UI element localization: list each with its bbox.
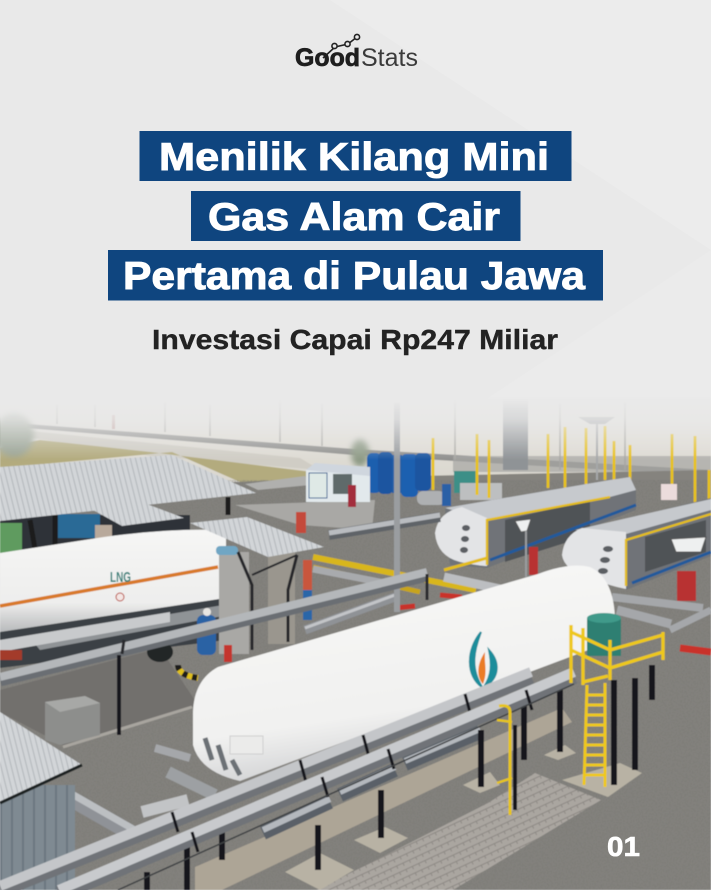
long pipe upper left <box>0 572 427 735</box>
yellow vent poles <box>433 426 709 510</box>
gas unit 1 <box>435 477 636 570</box>
LNG tanker: LNG <box>110 569 131 586</box>
main pipe A <box>0 672 531 890</box>
skid equipment <box>417 471 502 506</box>
photo: LNG plant <box>0 398 711 890</box>
dispenser column <box>216 546 312 654</box>
worker <box>197 608 216 655</box>
black pipe supports <box>147 690 560 890</box>
logo: GoodStats <box>295 34 418 72</box>
far road and fence <box>20 400 711 476</box>
lower foil pipe segments <box>263 729 480 833</box>
logo: GoodStats: Good <box>295 44 360 72</box>
page number: 01 <box>607 831 640 862</box>
yellow platform railing <box>571 625 663 685</box>
green cylinder <box>587 613 621 656</box>
fog overlay <box>0 398 711 460</box>
yellow valve post <box>497 706 515 815</box>
tank valves <box>142 738 240 812</box>
hazy backdrop <box>0 400 711 510</box>
paved walkway <box>317 773 601 890</box>
tower <box>503 400 528 470</box>
info signs <box>296 484 706 601</box>
light mast far <box>578 417 615 480</box>
logo: GoodStats: Stats <box>361 44 418 72</box>
title line 2 <box>191 191 520 241</box>
flame logo <box>470 632 497 687</box>
shelter frames <box>0 497 228 556</box>
blue tanks <box>367 452 431 497</box>
yellow ladder <box>584 683 605 787</box>
subtitle: Investasi Capai Rp247 Miliar <box>152 324 558 355</box>
title line 3: Pertama di Pulau Jawa <box>123 255 585 298</box>
title line 2: Gas Alam Cair <box>208 196 500 239</box>
left paving <box>0 648 198 747</box>
cabin bottom left <box>0 712 82 890</box>
main pipe B <box>59 672 574 890</box>
shelter roof small <box>84 500 184 526</box>
middle pipework <box>305 515 711 652</box>
tall mast <box>394 403 400 612</box>
grey utility box <box>45 696 100 745</box>
main LNG storage tank <box>193 566 615 781</box>
title line 1: Menilik Kilang Mini <box>159 136 549 179</box>
support footings <box>285 745 576 890</box>
hazard barrier <box>178 645 232 678</box>
shelter roof large <box>0 455 256 521</box>
gas unit 2 <box>562 498 711 590</box>
gravel ground <box>0 470 711 890</box>
LNG tanker <box>0 530 226 668</box>
concrete pipe sleeper <box>195 708 572 890</box>
grass and tree <box>0 413 369 484</box>
rear pipe <box>68 793 133 833</box>
title line 1 <box>140 131 572 181</box>
shelter roof front <box>190 517 324 557</box>
ladder platform base <box>562 763 642 797</box>
platform legs <box>614 665 652 785</box>
white cabin <box>306 463 370 507</box>
